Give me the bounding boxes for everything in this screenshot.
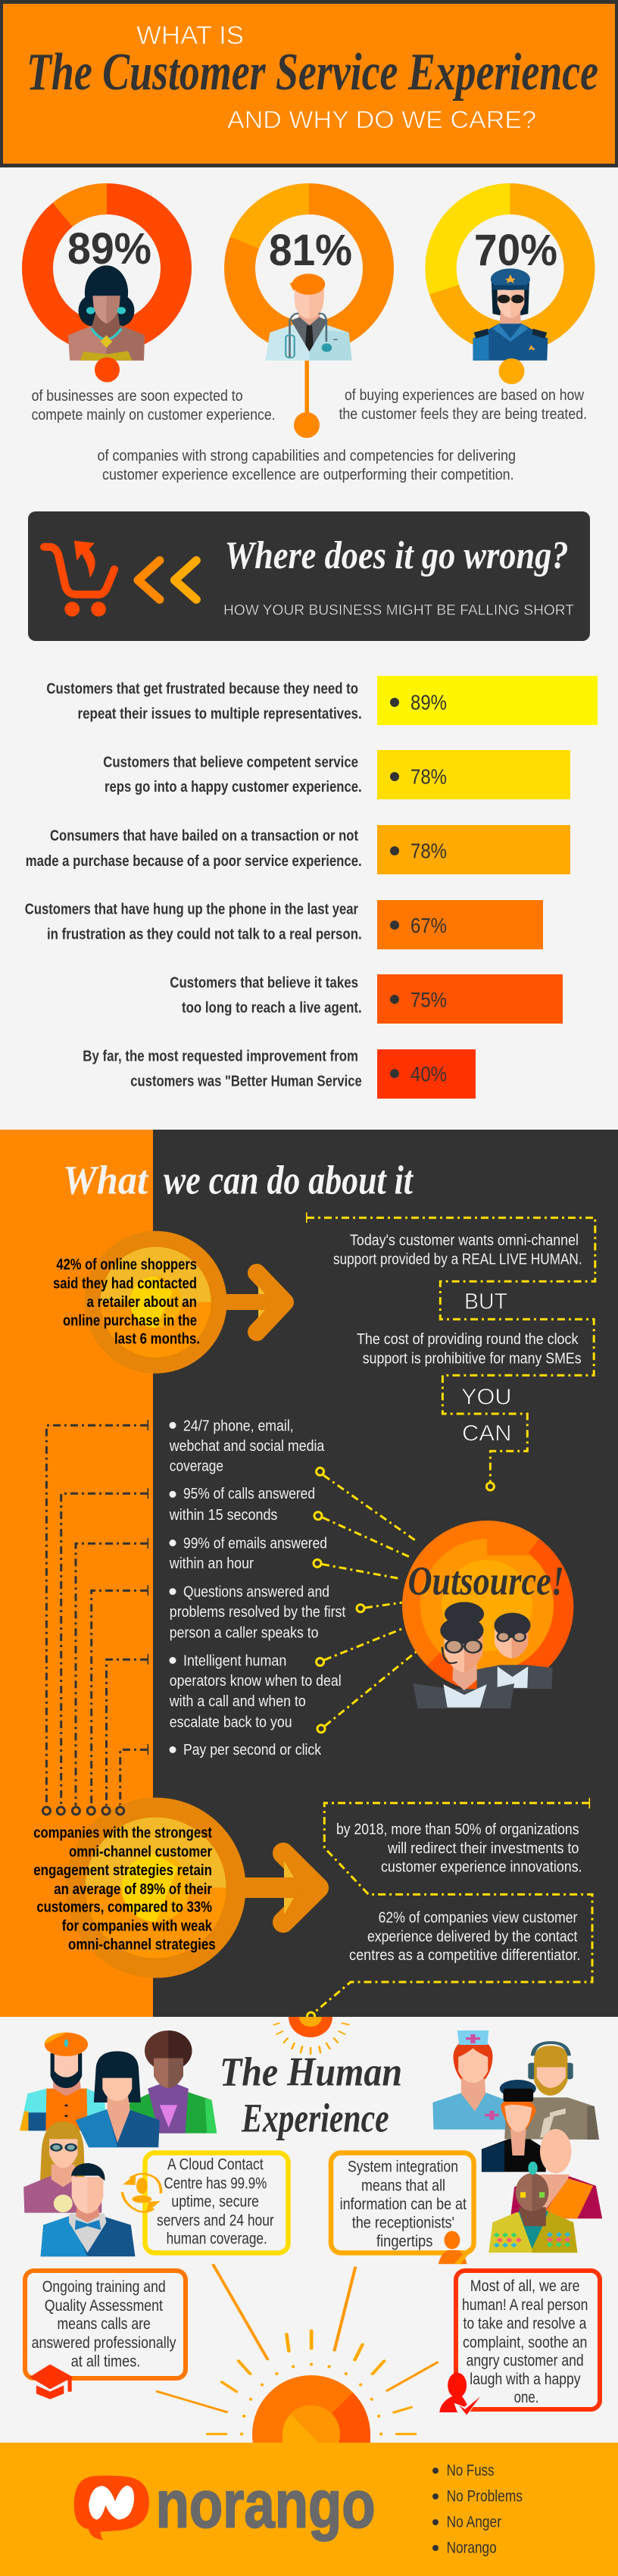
dashed text box: 2018 statistics: centres as a competitive differentiator. <box>349 1947 580 1964</box>
callout: system integration: means that all <box>361 2177 445 2195</box>
header banner <box>0 0 618 167</box>
service bullet list: 95% of calls answered <box>183 1486 315 1502</box>
bar row 3 <box>26 825 570 874</box>
callout text: an average of 89% of their <box>54 1881 212 1898</box>
callout: cloud contact centre: uptime, secure <box>171 2193 259 2211</box>
yellow connectors to outsource <box>314 1468 420 1733</box>
caption 89: compete mainly on customer experience. <box>32 407 276 424</box>
callout: cloud contact centre: servers and 24 hour <box>157 2212 274 2230</box>
sunburst rays and rising sun <box>156 2264 439 2493</box>
callout: system integration <box>331 2153 474 2264</box>
bar row 1: repeat their issues to multiple representatives. <box>77 705 362 722</box>
bar row 3: Consumers that have bailed on a transaction or not <box>50 828 358 845</box>
callout: ongoing training: Quality Assessment <box>45 2297 163 2315</box>
bar chart: where it goes wrong <box>25 676 598 1099</box>
bar row 6: By far, the most requested improvement from <box>83 1048 358 1064</box>
person with black fringe <box>76 2051 160 2147</box>
callout: most of all we are human: human! A real person <box>462 2296 588 2314</box>
service bullet list: operators know when to deal <box>170 1673 342 1690</box>
callout: system integration: the receptionists' <box>352 2215 454 2232</box>
person with dark cap <box>482 2080 546 2172</box>
callout: ongoing training: means calls are <box>58 2315 151 2333</box>
service bullet list: coverage <box>170 1458 223 1475</box>
service bullet list: Pay per second or click <box>183 1742 322 1758</box>
service bullet list: problems resolved by the first <box>170 1604 346 1621</box>
section heading: we can do about it <box>164 1158 414 1203</box>
donut chart 81 <box>230 183 379 338</box>
callout text: omni-channel customer <box>69 1844 212 1861</box>
service bullet list: person a caller speaks to <box>170 1624 318 1641</box>
icon: group of people left <box>20 2030 217 2256</box>
callout: most of all we are human: laugh with a happy <box>470 2371 581 2388</box>
callout: ongoing training: answered professionally <box>32 2334 176 2352</box>
caption 81: of companies with strong capabilities and competencies for delivering <box>97 448 516 464</box>
person with round glasses <box>23 2121 101 2213</box>
bar row 4: Customers that have hung up the phone in the last year <box>25 902 358 918</box>
donut chart 70 <box>426 183 579 338</box>
nurse <box>432 2030 513 2130</box>
icon: logo speech bubble <box>74 2475 149 2540</box>
person in green jacket <box>118 2030 217 2134</box>
bar row 5: too long to reach a live agent. <box>182 1000 362 1017</box>
dashed connectors on orange <box>46 1420 148 1805</box>
service bullet list: Questions answered and <box>183 1583 329 1600</box>
value 89: 89% <box>67 224 151 274</box>
service bullet list: within 15 seconds <box>169 1507 277 1524</box>
caption 81: customer experience excellence are outperforming their competition. <box>102 467 514 483</box>
bar row 6 <box>83 1048 476 1099</box>
heading: the human experience <box>220 2049 402 2140</box>
icon: person with pencil <box>439 2231 473 2264</box>
callout text: online purchase in the <box>63 1313 197 1330</box>
dashed text box: 2018 statistics: by 2018, more than 50% of organizations <box>336 1821 579 1838</box>
bar row 2: 78% <box>410 765 447 789</box>
monk <box>510 2129 602 2218</box>
callout: system integration: fingertips <box>376 2233 432 2250</box>
bar row 5: 75% <box>410 988 447 1011</box>
value 70: 70% <box>474 226 557 275</box>
bar row 2: reps go into a happy customer experience. <box>105 779 362 796</box>
bar row 3: 78% <box>410 839 447 862</box>
dashed flow: but you can: CAN <box>462 1421 512 1446</box>
bar row 4: 67% <box>410 914 447 937</box>
heading: the human experience: The Human <box>220 2049 402 2094</box>
norango logo <box>74 2467 376 2542</box>
stat 89 percent <box>32 183 276 424</box>
service bullet list: 24/7 phone, email, <box>183 1418 294 1434</box>
icon: graduation cap <box>30 2365 73 2399</box>
dashed text box: 2018 statistics: will redirect their investments to <box>387 1840 579 1857</box>
callout: most of all we are human: complaint, soothe an <box>463 2334 587 2351</box>
callout: most of all we are human: to take and resolve a <box>464 2315 587 2332</box>
callout text: omni-channel strategies <box>68 1937 216 1953</box>
caption 89: of businesses are soon expected to <box>32 388 243 405</box>
icon: group of people right <box>432 2030 602 2252</box>
dashed flow: but you can: Today's customer wants omni-channel <box>350 1232 579 1249</box>
dashed text box: 2018 statistics: experience delivered by the contact <box>367 1928 578 1945</box>
dashed text box: 2018 statistics: 62% of companies view customer <box>379 1909 578 1926</box>
panel: what we can do about it <box>0 1130 618 2020</box>
callout: ongoing training: Ongoing training and <box>42 2278 166 2296</box>
callout circle with arrow: 42 percent <box>53 1231 285 1374</box>
tagline list: No Problems <box>447 2488 523 2506</box>
footer <box>0 2443 618 2576</box>
tagline list <box>432 2462 523 2557</box>
icon: person with check mark <box>439 2373 482 2415</box>
callout: cloud contact centre: A Cloud Contact <box>167 2156 264 2173</box>
callout text: for companies with weak <box>62 1918 213 1935</box>
callout: system integration: System integration <box>348 2159 458 2176</box>
callout circle with arrow: omni-channel <box>33 1798 318 1978</box>
marker dot 89 <box>95 358 120 382</box>
person with mohawk <box>488 2162 577 2252</box>
bar row 6: customers was "Better Human Service <box>130 1074 362 1090</box>
callout: system integration: information can be at <box>340 2196 467 2213</box>
callout text: companies with the strongest <box>33 1825 212 1842</box>
callout text: a retailer about an <box>86 1294 197 1311</box>
callout text: 42% of online shoppers <box>56 1257 197 1274</box>
caption 70: of buying experiences are based on how <box>345 387 584 404</box>
title line: what is: WHAT IS <box>136 21 244 50</box>
outsource sun circle <box>402 1521 573 1692</box>
heading: Where does it go wrong? <box>225 534 569 577</box>
tagline list: Norango <box>447 2540 497 2557</box>
callout: cloud contact centre <box>122 2153 288 2253</box>
section heading: What <box>63 1158 149 1203</box>
service bullet list: webchat and social media <box>169 1438 325 1455</box>
dashed flow: but you can: support is prohibitive for many SMEs <box>363 1350 582 1367</box>
bar row 3: made a purchase because of a poor service experience. <box>26 853 362 870</box>
callout: cloud contact centre: human coverage. <box>167 2231 267 2248</box>
callout: cloud contact centre: Centre has 99.9% <box>164 2174 267 2192</box>
dashed flow: but you can: BUT <box>464 1289 507 1314</box>
person with bow tie <box>41 2163 135 2256</box>
callout text <box>33 1825 216 1953</box>
callout text: engagement strategies retain <box>33 1862 212 1879</box>
service bullet list: with a call and when to <box>169 1693 306 1710</box>
panel: where does it go wrong <box>28 511 590 641</box>
service bullet list: within an hour <box>169 1555 254 1572</box>
callout: most of all we are human: angry customer and <box>467 2352 584 2369</box>
bar row 5 <box>170 974 563 1024</box>
bar row 1: 89% <box>410 691 447 714</box>
stat 81 percent <box>97 183 516 483</box>
connector end rings on orange <box>42 1807 124 1815</box>
bar row 2: Customers that believe competent service <box>103 755 358 771</box>
bar row 2 <box>103 750 570 799</box>
bar row 1 <box>46 676 598 725</box>
bar row 5: Customers that believe it takes <box>170 974 358 991</box>
service bullet list: Intelligent human <box>183 1652 286 1669</box>
callout: most of all we are human: one. <box>514 2389 538 2406</box>
bar row 4 <box>25 900 543 949</box>
section heading <box>63 1158 414 1203</box>
tagline list: No Fuss <box>447 2462 495 2480</box>
service bullet list: 99% of emails answered <box>183 1535 327 1552</box>
small sun below dark section <box>274 2017 349 2054</box>
bar row 1: Customers that get frustrated because they need to <box>46 681 358 698</box>
stat 70 percent <box>339 183 587 423</box>
service bullet list <box>169 1418 346 1758</box>
marker dot 81 <box>294 412 320 438</box>
dashed text box: 2018 statistics <box>307 1798 592 2020</box>
person with headphones <box>504 2043 599 2140</box>
dashed flow: but you can: The cost of providing round the clock <box>357 1331 579 1348</box>
tagline list: No Anger <box>447 2514 501 2531</box>
icon: person with rotating arrows <box>122 2174 161 2213</box>
callout: ongoing training: at all times. <box>71 2352 140 2370</box>
subheading: HOW YOUR BUSINESS MIGHT BE FALLING SHORT <box>223 603 574 618</box>
callout text: said they had contacted <box>53 1276 197 1293</box>
service bullet list: escalate back to you <box>170 1714 292 1730</box>
dashed flow: but you can <box>306 1212 595 1490</box>
connector stem <box>304 361 309 415</box>
caption 81 <box>97 448 516 483</box>
callout text <box>53 1257 200 1348</box>
caption 89 <box>32 388 276 424</box>
icon: police officer <box>473 268 548 361</box>
caption 70 <box>339 387 587 423</box>
outsource label: Outsource! <box>408 1558 564 1604</box>
icon: double chevrons <box>138 561 196 599</box>
callout text: last 6 months. <box>114 1331 200 1348</box>
callout text: customers, compared to 33% <box>36 1899 212 1916</box>
dashed text box: 2018 statistics: customer experience innovations. <box>381 1859 582 1875</box>
caption 70: the customer feels they are being treated. <box>339 406 587 423</box>
callout: most of all we are human: Most of all, we are <box>470 2277 580 2295</box>
donut chart 89 <box>38 183 176 338</box>
dashed flow: but you can: support provided by a REAL LIVE HUMAN. <box>333 1252 582 1268</box>
heading: the human experience: Experience <box>241 2095 389 2140</box>
icon: doctor <box>265 274 352 361</box>
title line: why do we care: AND WHY DO WE CARE? <box>227 106 536 133</box>
marker dot 70 <box>498 358 524 384</box>
icon: shopping cart return <box>44 541 114 617</box>
icon: call centre operators <box>413 1602 553 1708</box>
logo wordmark: norango <box>156 2467 376 2542</box>
bar row 4: in frustration as they could not talk to a real person. <box>47 927 362 943</box>
value 81: 81% <box>269 226 352 275</box>
callout: most of all we are human <box>439 2271 600 2415</box>
callout: ongoing training <box>25 2271 186 2399</box>
bar row 6: 40% <box>410 1062 447 1086</box>
icon: woman with earrings <box>68 265 145 361</box>
dashed flow: but you can: YOU <box>461 1384 512 1409</box>
person with turban <box>20 2033 107 2131</box>
